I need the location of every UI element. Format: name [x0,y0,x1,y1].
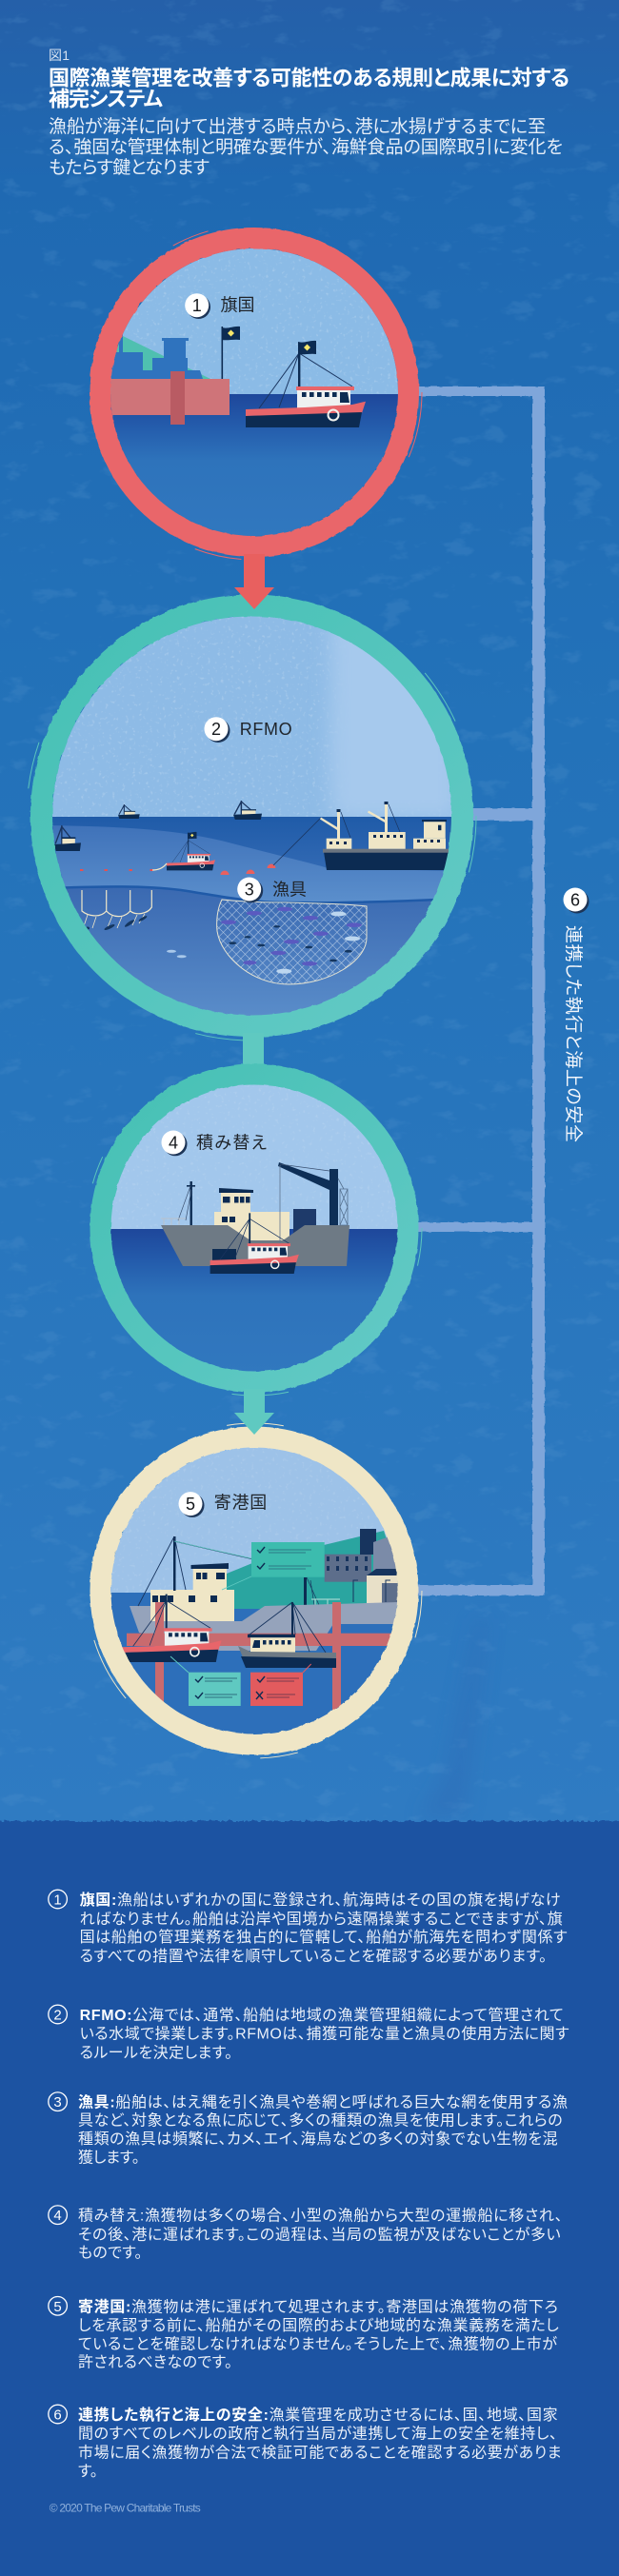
distant boats [118,804,140,819]
port buildings [105,334,203,379]
subtitle: る、強固な管理体制と明確な要件が、海鮮食品の国際取引に変化を [49,137,563,158]
marker 5 [49,2296,67,2315]
item 1 [49,1890,568,1965]
arrow: flag state to RFMO [234,554,274,609]
fish in net [221,907,362,966]
text 3: 種類の漁具は頻繁に、カメ、エイ、海鳥などの多くの対象でない生物を混 [78,2130,558,2148]
text 3: 漁具:船舶は、はえ縄を引く漁具や巻網と呼ばれる巨大な網を使用する漁 [78,2094,568,2111]
circle 4: transshipment [87,1060,422,1396]
item 3 [49,2092,568,2167]
badge 3 [237,878,263,902]
text 4: ものです。 [78,2245,142,2262]
text 5: しを承認する前に、船舶がその国際的および地域的な漁業義務を満たし [78,2317,559,2334]
text 1: るすべての措置や法律を順守していることを確認する必要があります。 [80,1948,547,1965]
longline gear [82,890,151,928]
scene [110,1084,398,1344]
marker 4: 4 [53,2208,62,2224]
badge 1: 1 [192,296,202,315]
badge 6: 6 [570,891,580,910]
checklist: teal bottom [170,1656,241,1706]
text 1: ればなりません。船舶は沿岸や国境から遠隔操業することできますが、旗 [80,1911,563,1928]
text 4 [78,2208,563,2262]
text 4: その後、港に運ばれます。この過程は、当局の監視が及ばないことが多い [78,2227,561,2244]
ring [100,238,409,546]
badge 1 [185,293,210,319]
ring [42,605,463,1026]
connector: RFMO to transshipment [243,1033,264,1066]
marker 2: 2 [53,2007,62,2024]
text 1: 旗国:漁船はいずれかの国に登録され、航海時はその国の旗を掲げなけ [80,1891,561,1909]
scene [105,243,409,542]
fishing boat [246,341,366,427]
figure label: 図1 [49,48,70,63]
text 1 [80,1891,568,1965]
subtitle: もたらす鍵となります [49,157,210,178]
circle 1: flag state [87,225,422,560]
badge 4: 4 [169,1133,178,1152]
pier flag [221,327,240,379]
badge 6 [564,887,589,914]
pier [105,379,230,415]
marker 6 [49,2405,67,2424]
badge 5: 5 [186,1495,195,1514]
circle 5: port state [87,1423,422,1758]
back vessel [130,1536,400,1651]
pier [127,1602,403,1714]
checklist: teal top [174,1541,325,1590]
small fishing boat [167,832,215,870]
explanatory items [49,1890,569,2480]
text 3: 獲します。 [78,2150,140,2167]
text 3: 具など、対象となる魚に応じて、多くの種類の漁具を使用します。これらの [78,2112,563,2130]
label: port state: 寄港国 [214,1493,267,1512]
title [49,67,569,110]
badge 2: 2 [211,720,221,739]
scene [110,1447,398,1734]
fishing boat [210,1213,299,1274]
badge 3: 3 [245,880,254,899]
text 3 [78,2094,568,2167]
text 2: るルールを決定します。 [80,2044,232,2061]
hill [110,336,210,379]
vessel 2 [238,1602,336,1668]
title: 国際漁業管理を改善する可能性のある規則と成果に対する [49,67,569,89]
badge 4 [162,1131,187,1156]
text 1: 国は船舶の管理業務を独占的に管轄して、船舶が航海先を問わず関係す [80,1929,568,1946]
text 5: 許されるべきなのです。 [78,2354,232,2371]
marker 6: 6 [53,2407,62,2424]
label 6 vertical [563,887,589,1142]
text 5: 寄港国:漁獲物は港に運ばれて処理されます。寄港国は漁獲物の荷下ろ [78,2298,558,2315]
fishing boat [122,1595,222,1662]
marker 1: 1 [53,1892,62,1908]
marker 3: 3 [53,2094,62,2110]
subtitle: 漁船が海洋に向けて出港する時点から、港に水揚げするまでに至 [49,116,546,137]
label: RFMO: RFMO [240,720,292,739]
connector: coordinated enforcement [417,386,545,1595]
hill and town [222,1529,409,1609]
title: 補完システム [49,88,163,110]
floats and line [80,818,321,875]
copyright: © 2020 The Pew Charitable Trusts [50,2502,201,2515]
badge 5 [179,1492,204,1517]
text 2: いる水域で操業します。RFMOは、捕獲可能な量と漁具の使用方法に関す [80,2026,569,2043]
subtitle [49,116,563,178]
text 2: RFMO:公海では、通常、船舶は地域の漁業管理組織によって管理されて [80,2007,564,2024]
label: transshipment: 積み替え [196,1133,267,1152]
text 6: 市場に届く漁獲物が合法で検証可能であることを確認する必要がありま [78,2444,562,2461]
badge 2 [204,717,230,743]
item 5 [49,2296,559,2371]
purse seine net [217,900,367,984]
header [49,48,569,110]
label: flag state: 旗国 [221,295,255,314]
carrier vessel [161,1162,349,1266]
marker 2 [49,2005,67,2024]
text 6 [78,2406,562,2480]
factory ship [320,802,449,870]
checklist: red [250,1664,311,1706]
vertical caption: 連携した執行と海上の安全 [563,925,584,1142]
ring [101,1074,408,1382]
marker 3 [49,2092,67,2111]
item 4 [49,2206,563,2262]
text 6: 連携した執行と海上の安全:漁業管理を成功させるには、国、地域、国家 [78,2406,558,2424]
text 6: 間のすべてのレベルの政府と執行当局が連携して海上の安全を維持し、 [78,2426,557,2443]
ring [101,1437,408,1744]
bottom text panel [0,1821,619,2576]
marker 1 [49,1890,67,1909]
text 2 [80,2007,569,2061]
text 5: ていることを確認しなければなりません。そうした上で、漁獲物の上市が [78,2335,557,2352]
text 5 [78,2298,559,2371]
deep water [67,887,431,1016]
text 6: す。 [78,2463,98,2480]
scene [48,609,457,1019]
item 2 [49,2005,569,2061]
marker 5: 5 [53,2299,62,2315]
marker 4 [49,2206,67,2224]
arrow: transshipment to port state [234,1389,274,1435]
label: fishing gear: 漁具 [272,880,307,899]
item 6 [49,2405,562,2480]
background [0,0,619,1822]
text 4: 積み替え:漁獲物は多くの場合、小型の漁船から大型の運搬船に移され、 [78,2208,563,2225]
circle 2: RFMO [27,591,476,1040]
